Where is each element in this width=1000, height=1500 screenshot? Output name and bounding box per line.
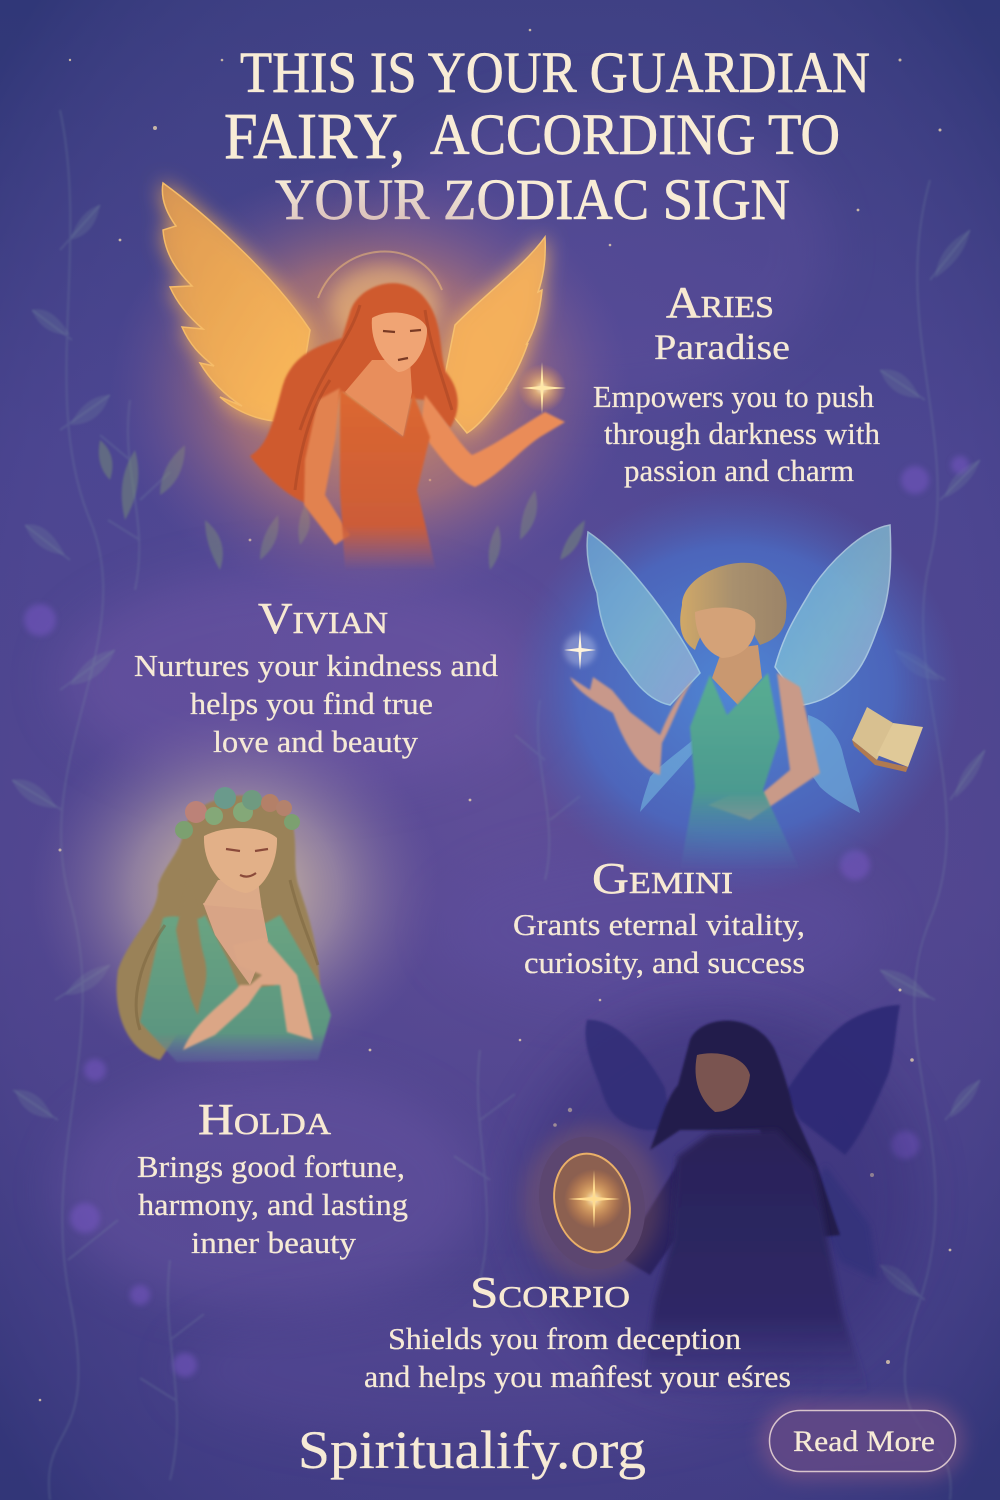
- dress: [140, 915, 331, 1062]
- upper left wing: [587, 532, 700, 705]
- text block: Holda: Brings good fortune,: [137, 1149, 405, 1184]
- text block: Holda: Holda: [198, 1095, 332, 1144]
- text block: Holda: inner beauty: [191, 1225, 357, 1260]
- title: FAIRY,: [224, 100, 405, 173]
- text block: Vivian: love and beauty: [213, 724, 419, 759]
- right wing: [440, 237, 545, 433]
- text block: Gemini: curiosity, and success: [524, 945, 805, 980]
- halo: [318, 251, 442, 298]
- left arm and hand: [570, 677, 693, 775]
- lower right wing: [808, 715, 860, 813]
- fairy illustration: Holda earth fairy: [30, 705, 440, 1075]
- left sleeve: [625, 1160, 680, 1275]
- read more button: Read More: [793, 1425, 935, 1458]
- left wing: [162, 183, 310, 421]
- lower right wing: [810, 1165, 878, 1280]
- text block: Gemini: [513, 854, 805, 980]
- read more button: [760, 1402, 964, 1480]
- title: ACCORDING TO: [430, 102, 840, 167]
- hair: [680, 563, 787, 650]
- upper right wing: [775, 525, 891, 705]
- text block: Vivian: Nurtures your kindness and: [134, 648, 499, 683]
- side leaves: [12, 205, 985, 1297]
- text block: Gemini: Grants eternal vitality,: [513, 907, 805, 942]
- glowing shield: [522, 1125, 662, 1281]
- spark: [518, 362, 566, 414]
- hair: [117, 795, 320, 1060]
- brand name: Spiritualify.org: [298, 1420, 646, 1480]
- face: [204, 828, 277, 893]
- hair locks: [136, 880, 318, 1030]
- lower left wing: [640, 740, 693, 812]
- text block: Vivian: [134, 594, 499, 759]
- dress: [640, 1130, 870, 1395]
- text block: Vivian: helps you find true: [190, 686, 433, 721]
- icon: open book: [852, 707, 923, 772]
- neck: [203, 880, 262, 910]
- text block: Aries: Paradise: [654, 327, 790, 367]
- neck: [712, 645, 762, 705]
- left arm: [304, 388, 350, 545]
- face: [695, 607, 755, 658]
- text block: Vivian: Vivian: [258, 594, 388, 643]
- dress: [340, 390, 436, 570]
- text block: Aries: Aries: [666, 278, 774, 327]
- small purple flowers: [24, 456, 969, 1377]
- flower crown: [175, 787, 300, 839]
- hands and arms: [183, 938, 313, 1050]
- right wing: [785, 1005, 900, 1155]
- green leaves around Aries fairy: [99, 440, 585, 570]
- text block: Holda: harmony, and lasting: [138, 1187, 408, 1222]
- fairy illustration: Gemini blue fairy: [510, 485, 960, 895]
- fairy illustration: Scorpio dark fairy: [520, 1005, 920, 1395]
- dress: [680, 673, 800, 870]
- fairy illustration: Aries orange fairy: [110, 165, 630, 605]
- facial features: [226, 849, 268, 877]
- title: YOUR ZODIAC SIGN: [275, 167, 790, 232]
- text block: Aries: passion and charm: [624, 453, 854, 488]
- sparkle: [564, 630, 596, 670]
- text block: Scorpio: and helps you man̂fest your eśres: [364, 1359, 791, 1394]
- text block: Scorpio: [364, 1268, 791, 1394]
- text block: Aries: through darkness with: [604, 416, 880, 451]
- neck and chest: [345, 360, 412, 436]
- text block: Aries: [593, 278, 880, 488]
- chest: [203, 903, 268, 985]
- hair: [650, 1021, 840, 1240]
- text block: Scorpio: Shields you from deception: [388, 1321, 742, 1356]
- facial features: [383, 330, 421, 360]
- hair: [250, 283, 458, 505]
- title: [224, 40, 870, 232]
- hair strands: [295, 305, 452, 490]
- left wing: [585, 1020, 672, 1130]
- text block: Aries: Empowers you to push: [593, 379, 874, 414]
- text block: Scorpio: Scorpio: [470, 1268, 630, 1317]
- left hair lock over dress: [176, 880, 206, 1015]
- text block: Gemini: Gemini: [592, 854, 733, 903]
- title: THIS IS YOUR GUARDIAN: [240, 40, 870, 105]
- right arm and hand: [420, 395, 565, 487]
- face: [372, 313, 427, 372]
- face: [696, 1053, 750, 1112]
- text block: Holda: [137, 1095, 408, 1260]
- right arm and hand: [708, 673, 820, 820]
